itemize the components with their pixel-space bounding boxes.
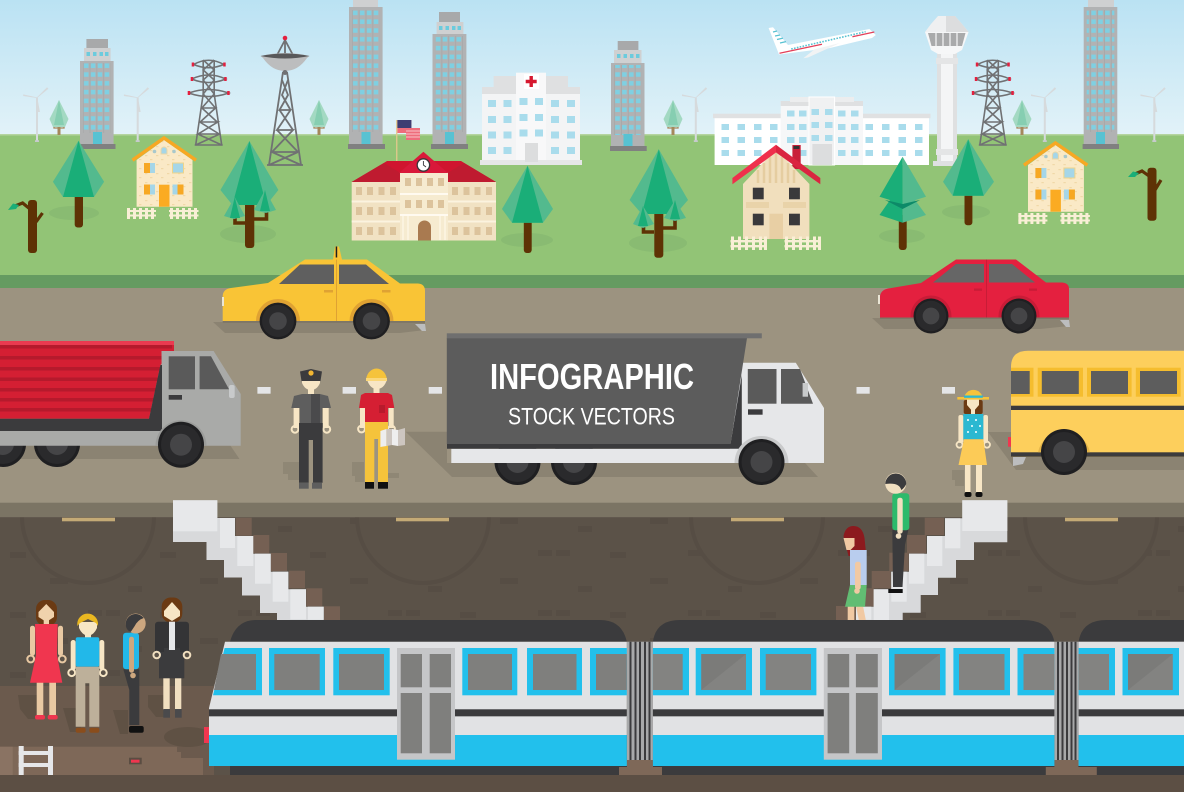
train connector 2 [1046,642,1097,775]
house orange roof right [1018,143,1090,224]
box truck with title [406,333,824,485]
hospital [480,73,582,165]
tree center [502,166,553,253]
school building with clock [352,120,496,240]
dump truck [0,341,241,468]
tree shadows [49,205,990,252]
woman on stairs [844,526,867,621]
branched tree [220,141,278,248]
skyscraper 1 [80,39,116,149]
train car 1 [204,620,627,766]
yellow taxi [213,246,426,339]
woman in red dress [27,600,66,720]
police officer [283,369,331,489]
man on stairs [885,473,909,593]
right staircase [836,500,1007,620]
platform ladder [19,746,53,775]
skyscraper 4 [610,41,647,151]
house orange roof left [127,138,198,219]
red floor marker [129,758,142,764]
dead stump left [8,200,42,253]
wind turbines [24,88,1165,142]
underground wall [0,449,1184,777]
businesswoman in suit [153,598,190,718]
small distant trees [50,100,1032,135]
grass field [0,134,1184,289]
house red roof [730,145,821,250]
air traffic control tower [925,16,969,166]
train car 2 [653,620,1054,766]
subtitle text: STOCK VECTORS [508,404,675,430]
airport terminal [713,97,930,165]
train connector 1 [619,642,662,775]
person shadows on platform [18,695,166,734]
man in blue shirt [68,614,107,733]
two-tier pine tree [880,157,926,250]
construction worker [352,368,405,489]
train undercarriage [230,766,1184,775]
left staircase [173,500,340,620]
red car [872,260,1070,333]
yellow tunnel lights [62,518,1118,521]
road lane dashes [257,387,955,394]
subway platform [0,686,214,776]
girl with hat [952,390,990,497]
power pylon right [972,60,1014,145]
subway train [204,620,1184,775]
skyscraper 5 [1083,0,1119,149]
road [0,288,1184,517]
dead stump right [1128,168,1161,221]
power pylon left [188,60,230,145]
sky [0,0,1184,135]
bottom floor [0,775,1184,792]
train car 3 [1079,620,1184,766]
school bus [988,351,1184,475]
title text: INFOGRAPHIC [490,356,694,397]
skyscraper 2 [348,0,385,149]
radio tower with dish [260,36,310,165]
tree left [53,141,104,228]
branched tree right [630,149,688,258]
tree right [943,139,994,225]
airplane [769,27,876,58]
man in profile [123,614,146,733]
skyscraper 3 [431,12,468,149]
